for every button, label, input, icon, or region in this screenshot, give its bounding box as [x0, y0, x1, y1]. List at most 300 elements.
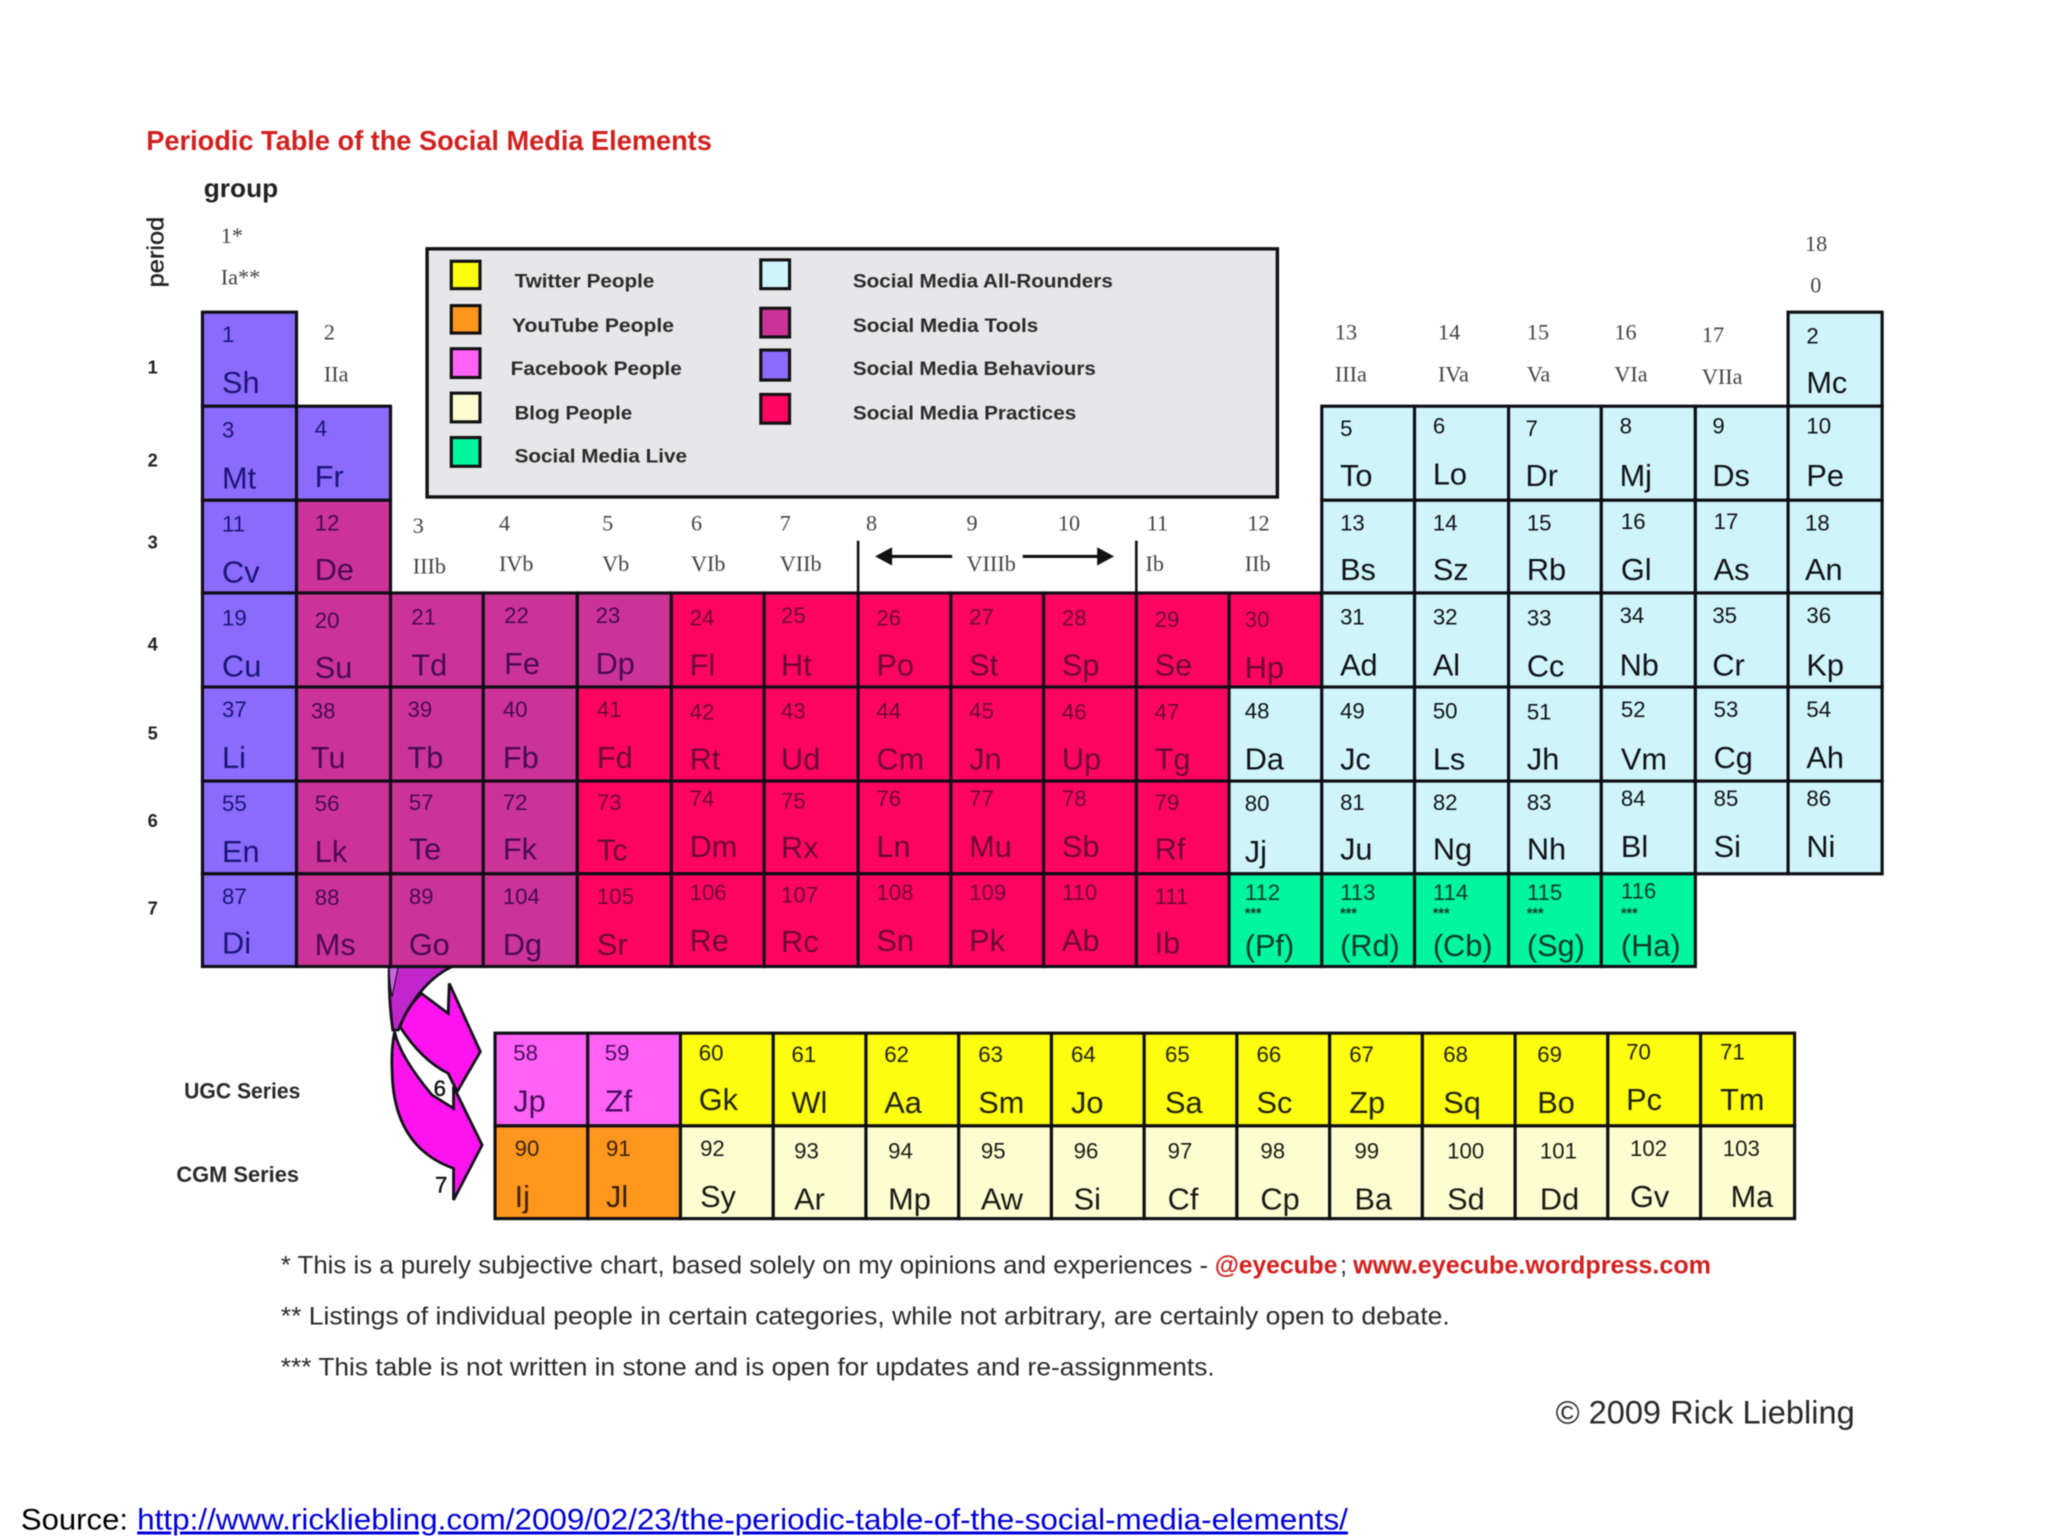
cell: Li — [202, 687, 296, 781]
cell: As: As — [1714, 552, 1749, 587]
cell: Cr: 35 — [1712, 603, 1737, 628]
group headers: 2 — [324, 320, 335, 345]
cell: Go — [391, 874, 483, 967]
group headers: 15 — [1527, 320, 1549, 345]
cell: Ma — [1701, 1126, 1795, 1219]
cell: Po: 26 — [876, 606, 901, 631]
cell: Kp: 36 — [1806, 603, 1831, 628]
cell: Sz: 14 — [1433, 510, 1458, 535]
cell: Pk — [951, 874, 1044, 967]
cell: Sp: 28 — [1062, 606, 1087, 631]
cell: Ms: Ms — [315, 927, 356, 962]
cell: Gl: Gl — [1621, 552, 1652, 587]
cell: Cv: Cv — [222, 555, 260, 590]
cell: Jo — [1051, 1033, 1144, 1126]
cell: Tm: Tm — [1720, 1082, 1764, 1117]
cell: Sd: 100 — [1447, 1139, 1484, 1164]
footnote 1: ; — [1340, 1252, 1347, 1279]
cell: Li: Li — [222, 740, 246, 775]
cell: Cc: Cc — [1527, 649, 1564, 684]
cell: Up: 46 — [1062, 700, 1087, 725]
cell: Sy: 92 — [700, 1136, 725, 1161]
group headers: VIIb — [780, 551, 822, 576]
cell: Se: 29 — [1155, 607, 1179, 632]
cell: Fr — [296, 406, 391, 500]
legend: Social Media Practices — [761, 394, 1076, 424]
cell: Al: Al — [1433, 647, 1460, 682]
cell: (Cb) — [1415, 874, 1509, 967]
cell: Ds: 9 — [1712, 414, 1725, 439]
cell: Pc: 70 — [1626, 1039, 1651, 1064]
cell: Hp: 30 — [1245, 607, 1269, 632]
cell: Sq: 68 — [1443, 1042, 1468, 1067]
cell: Sa: Sa — [1165, 1085, 1204, 1120]
cell: Up: Up — [1062, 741, 1101, 776]
cell: Jl — [588, 1126, 680, 1219]
cell: Ba: 99 — [1354, 1139, 1379, 1164]
cell: Ls: 50 — [1433, 698, 1458, 723]
cell: Al — [1415, 593, 1509, 687]
cell: Jn — [951, 687, 1044, 781]
cell: Ni: Ni — [1806, 829, 1835, 864]
cell: Ad: 31 — [1340, 604, 1365, 629]
cell: Nh — [1509, 781, 1601, 874]
footnote 3: *** This table is not written in stone and is open for updates and re-assignments. — [281, 1354, 1215, 1381]
cell: Mp — [866, 1126, 959, 1219]
group headers: 11 — [1147, 510, 1168, 535]
cell: St: St — [969, 647, 999, 682]
cell: Jj: 80 — [1245, 791, 1269, 816]
cell: Tg: 47 — [1155, 700, 1179, 725]
cell: De: 12 — [315, 510, 339, 535]
cell: Aa: Aa — [884, 1085, 923, 1120]
cell: Cf — [1144, 1126, 1237, 1219]
cell: Bl: Bl — [1621, 829, 1648, 864]
cell: Hp — [1229, 593, 1322, 687]
cell: Ms: 88 — [315, 885, 339, 910]
cell: (Sg): (Sg) — [1527, 928, 1585, 963]
cell: Lo — [1415, 406, 1509, 500]
cell: Cg — [1695, 687, 1788, 781]
cell: De — [296, 500, 391, 593]
cell: En: 55 — [222, 791, 247, 816]
cell: Ij: Ij — [515, 1179, 530, 1214]
cell: Fe: 22 — [504, 603, 529, 628]
cell: Tu — [296, 687, 391, 781]
cell: Ud — [764, 687, 858, 781]
cell: Cp — [1237, 1126, 1330, 1219]
legend: Twitter People — [451, 261, 654, 292]
cell: Cu: 19 — [222, 606, 247, 631]
cell: Mt — [202, 406, 296, 500]
cell: Tu: 38 — [311, 698, 336, 723]
cell: (Pf): *** — [1245, 906, 1262, 922]
cell: Sc: Sc — [1256, 1085, 1292, 1120]
cell: Se — [1136, 593, 1229, 687]
legend: Social Media Practices: Social Media Practices — [853, 402, 1076, 424]
cell: Jh: Jh — [1527, 741, 1559, 776]
cell: Mj: Mj — [1620, 458, 1652, 493]
cell: Cr — [1695, 593, 1788, 687]
cell: Fk — [483, 781, 577, 874]
cell: Tg: Tg — [1155, 741, 1190, 776]
cell: Ad: Ad — [1340, 647, 1378, 682]
cell: Ab: 110 — [1062, 880, 1097, 905]
cell: Tc: Tc — [597, 833, 628, 868]
cell: Hp: Hp — [1245, 650, 1284, 685]
cell: Su — [296, 593, 391, 687]
period numbers: 2 — [148, 449, 158, 470]
group headers: 12 — [1247, 510, 1270, 535]
legend: Social Media Live — [451, 438, 687, 467]
cell: Jp — [495, 1033, 588, 1126]
cell: Rf: 79 — [1155, 790, 1179, 815]
group headers: 14 — [1438, 320, 1460, 345]
cell: Re — [671, 874, 764, 967]
cell: Gl: 16 — [1621, 509, 1646, 534]
cell: Sb: Sb — [1062, 829, 1099, 864]
cell: (Rd): 113 — [1340, 880, 1375, 905]
cell: Rt: 42 — [690, 700, 714, 725]
cell: Fb — [483, 687, 577, 781]
cell: Cp: 98 — [1260, 1139, 1285, 1164]
group headers: 10 — [1058, 510, 1080, 535]
group headers: Vb — [602, 551, 629, 576]
cell: Sn: Sn — [876, 923, 914, 958]
cell: Cu: Cu — [222, 649, 261, 684]
cell: Dp: Dp — [596, 646, 635, 681]
title: Periodic Table of the Social Media Elements — [146, 125, 712, 156]
cell: Ma: 103 — [1723, 1136, 1760, 1161]
cell: Al: 32 — [1433, 604, 1458, 629]
cell: Jo: Jo — [1071, 1085, 1103, 1120]
cell: Ln — [858, 781, 951, 874]
cell: Dg — [483, 874, 577, 967]
cell: Bl — [1601, 781, 1695, 874]
cell: Sr: Sr — [597, 927, 628, 962]
cell: Gv: 102 — [1630, 1136, 1667, 1161]
cell: Mu: Mu — [969, 829, 1012, 864]
cell: Cm: Cm — [876, 741, 924, 776]
cell: Rc — [764, 874, 858, 967]
cell: Sr — [577, 874, 671, 967]
cell: Ib: Ib — [1155, 925, 1180, 960]
cell: Dr — [1509, 406, 1601, 500]
cell: Aw: 95 — [981, 1139, 1006, 1164]
cell: Jh: 51 — [1527, 700, 1552, 725]
cell: Fk: 72 — [503, 790, 528, 815]
group headers: VIIIb — [967, 551, 1016, 576]
cell: Tc — [577, 781, 671, 874]
legend: Twitter People: Twitter People — [515, 270, 654, 292]
cell: Sm: 63 — [978, 1042, 1003, 1067]
cell: Sa — [1144, 1033, 1237, 1126]
cell: (Ha): *** — [1621, 906, 1638, 922]
group headers: 6 — [691, 510, 702, 535]
cell: Rt: Rt — [690, 741, 721, 776]
legend: Social Media Behaviours: Social Media Behaviours — [853, 358, 1096, 380]
cell: Jl: Jl — [606, 1179, 628, 1214]
cell: Bo: Bo — [1537, 1085, 1575, 1120]
cell: Cm: 44 — [876, 698, 901, 723]
cell: Sc — [1237, 1033, 1330, 1126]
cell: Rf: Rf — [1155, 831, 1186, 866]
cell: Ng: Ng — [1433, 831, 1472, 866]
cell: Ht — [764, 593, 858, 687]
cell: Fr: Fr — [315, 459, 344, 494]
cell: Ba — [1330, 1126, 1422, 1219]
cell: (Rd) — [1322, 874, 1415, 967]
cell: Go: Go — [409, 927, 450, 962]
legend: Blog People — [451, 393, 632, 424]
cell: Mp: 94 — [888, 1139, 913, 1164]
group headers: 17 — [1702, 322, 1724, 347]
cell: As — [1695, 500, 1788, 593]
cell: Fb: 40 — [503, 697, 528, 722]
cell: Si — [1695, 781, 1788, 874]
group headers: 1* — [221, 223, 243, 248]
cell: Tg — [1136, 687, 1229, 781]
cell: Ln: Ln — [876, 829, 911, 864]
cell: Fl: Fl — [690, 647, 715, 682]
cell: Ma: Ma — [1731, 1179, 1774, 1214]
cell: Si: 96 — [1074, 1139, 1098, 1164]
cell: Bl: 84 — [1621, 786, 1646, 811]
cell: Da: Da — [1245, 741, 1285, 776]
cell: Rx: Rx — [781, 830, 819, 865]
cell: Fk: Fk — [503, 831, 538, 866]
cell: Di — [202, 874, 296, 967]
cell: Tb: 39 — [408, 697, 432, 722]
cell: (Cb): *** — [1433, 906, 1450, 922]
cell: Pe — [1788, 406, 1882, 500]
cell: Cg: Cg — [1714, 740, 1753, 775]
cell: Te — [391, 781, 483, 874]
cell: Sq: Sq — [1443, 1085, 1481, 1120]
cell: Cp: Cp — [1260, 1181, 1300, 1216]
cell: Aa: 62 — [884, 1042, 909, 1067]
cell: Td — [391, 593, 483, 687]
cell: An: 18 — [1805, 510, 1830, 535]
legend: Social Media Behaviours — [761, 350, 1096, 380]
series labels: CGM Series — [176, 1162, 299, 1187]
cell: St — [951, 593, 1044, 687]
cell: Zp: 67 — [1349, 1042, 1374, 1067]
cell: Kp — [1788, 593, 1882, 687]
cell: Sr: 105 — [597, 884, 634, 909]
cell: (Cb): (Cb) — [1433, 928, 1492, 963]
cell: Mp: Mp — [888, 1181, 931, 1216]
footnote 1: www.eyecube.wordpress.com — [1352, 1252, 1711, 1279]
cell: Vm: Vm — [1621, 741, 1667, 776]
cell: Te: Te — [409, 831, 441, 866]
cell: Zf — [588, 1033, 680, 1126]
cell: Dg: Dg — [503, 927, 542, 962]
legend: Blog People: Blog People — [515, 402, 632, 424]
legend: YouTube People — [451, 306, 674, 337]
series arrows: 7 — [435, 1172, 447, 1197]
cell: (Sg): 115 — [1527, 880, 1562, 905]
cell: Tb — [391, 687, 483, 781]
cell: Fb: Fb — [503, 740, 539, 775]
cell: To — [1322, 406, 1415, 500]
legend: Social Media All-Rounders — [761, 260, 1113, 292]
cell: (Sg) — [1509, 874, 1601, 967]
cell: Mc — [1788, 312, 1882, 406]
cell: An — [1788, 500, 1882, 593]
cell: Dp — [577, 593, 671, 687]
group headers: IIIa — [1335, 361, 1367, 386]
cell: Dg: 104 — [503, 884, 540, 909]
source line: http://www.rickliebling.com/2009/02/23/the-periodic-table-of-the-social-media-elements/ — [137, 1503, 1349, 1536]
cell: Cf: 97 — [1168, 1139, 1192, 1164]
cell: Po — [858, 593, 951, 687]
group headers: 5 — [602, 510, 613, 535]
cell: Sq — [1422, 1033, 1515, 1126]
cell: Su: 20 — [315, 608, 339, 633]
cell: Fe: Fe — [504, 646, 540, 681]
cell: Ni: 86 — [1806, 786, 1831, 811]
period numbers: 6 — [148, 810, 158, 831]
cell: Dm: Dm — [690, 829, 737, 864]
cell: Lk: Lk — [315, 834, 348, 869]
cell: Ah: 54 — [1806, 697, 1831, 722]
cell: Mc: 2 — [1806, 324, 1819, 349]
cell: Fd: 41 — [597, 697, 622, 722]
cell: Jj: Jj — [1245, 834, 1267, 869]
series arrows — [389, 967, 482, 1200]
cell: Sb: 78 — [1062, 786, 1087, 811]
cell: Kp: Kp — [1806, 647, 1844, 682]
cell: Vm — [1601, 687, 1695, 781]
cell: Nb: 34 — [1620, 603, 1644, 628]
cell: (Ha): (Ha) — [1621, 928, 1681, 963]
cell: Ad — [1322, 593, 1415, 687]
cell: Nh: Nh — [1527, 831, 1566, 866]
cell: Jl: 91 — [606, 1136, 631, 1161]
cell: Cc — [1509, 593, 1601, 687]
cell: St: 27 — [969, 604, 994, 629]
cell: Ud: 43 — [781, 698, 806, 723]
cell: En — [202, 781, 296, 874]
cell: Si: 85 — [1714, 786, 1738, 811]
group headers: 16 — [1614, 320, 1637, 345]
cell: Zf: 59 — [605, 1041, 629, 1066]
cell: Rx — [764, 781, 858, 874]
cell: Si: Si — [1074, 1181, 1101, 1216]
cell: Jp: Jp — [513, 1084, 546, 1119]
axis label: group: group — [204, 173, 278, 203]
cell: Sm: Sm — [978, 1085, 1024, 1120]
cell: Pc: Pc — [1626, 1082, 1662, 1117]
cell: Bs: 13 — [1340, 510, 1365, 535]
cell: Td: 21 — [411, 604, 436, 629]
cell: Ln: 76 — [876, 786, 901, 811]
cell: Lk: 56 — [315, 791, 339, 816]
cell: Mc: Mc — [1806, 365, 1847, 400]
cell: Cf: Cf — [1168, 1181, 1199, 1216]
cell: As: 17 — [1714, 509, 1738, 534]
cell: Mu — [951, 781, 1044, 874]
cell: Wl: 61 — [792, 1042, 816, 1067]
group headers: IIa — [324, 361, 349, 386]
group headers: 4 — [499, 510, 510, 535]
cell: Tu: Tu — [311, 740, 346, 775]
cell: Sc: 66 — [1256, 1042, 1281, 1067]
cell: Fd — [577, 687, 671, 781]
cell: (Rd): (Rd) — [1340, 928, 1400, 963]
cell: Tm — [1701, 1033, 1795, 1126]
group headers: Ia** — [221, 265, 260, 290]
cell: Jj — [1229, 781, 1322, 874]
cell: Fe — [483, 593, 577, 687]
cell: Gk: Gk — [699, 1082, 739, 1117]
cell: Lk — [296, 781, 391, 874]
legend: Social Media Tools: Social Media Tools — [853, 315, 1038, 337]
cell: Gv — [1608, 1126, 1701, 1219]
cell: Mu: 77 — [969, 786, 994, 811]
cell: Mj — [1601, 406, 1695, 500]
footnote 2: ** Listings of individual people in certain categories, while not arbitrary, are certainly open to debate. — [281, 1303, 1450, 1330]
cell: Lo: 6 — [1433, 414, 1445, 439]
legend: Facebook People — [451, 349, 682, 380]
cell: (Ha) — [1601, 874, 1695, 967]
cell: Gk — [680, 1033, 773, 1126]
cell: Dm: 74 — [690, 786, 714, 811]
cell: Pe: Pe — [1806, 458, 1844, 493]
cell: En: En — [222, 834, 260, 869]
cell: Dd — [1515, 1126, 1608, 1219]
panel: legend — [427, 249, 1277, 497]
cell: Pe: 10 — [1806, 414, 1831, 439]
cell: Ah: Ah — [1806, 740, 1844, 775]
cell: Di: Di — [222, 925, 251, 960]
group headers: 0 — [1810, 273, 1821, 298]
cell: Gv: Gv — [1630, 1179, 1670, 1214]
cell: (Rd): *** — [1340, 906, 1357, 922]
cell: Ls — [1415, 687, 1509, 781]
cell: Ni — [1788, 781, 1882, 874]
period numbers: 4 — [148, 633, 159, 654]
cell: Sz: Sz — [1433, 552, 1469, 587]
cell: Tm: 71 — [1720, 1039, 1745, 1064]
cell: Su: Su — [315, 650, 352, 685]
group headers: IVa — [1438, 361, 1469, 386]
cell: Di: 87 — [222, 884, 247, 909]
cell: Sd: Sd — [1447, 1181, 1485, 1216]
cell: Jo: 64 — [1071, 1042, 1096, 1067]
footnote 1: * This is a purely subjective chart, based solely on my opinions and experiences - — [281, 1252, 1208, 1279]
cell: Rb: Rb — [1527, 552, 1566, 587]
legend: Social Media Tools — [761, 308, 1038, 337]
cell: Si: Si — [1714, 829, 1741, 864]
cell: (Pf) — [1229, 874, 1322, 967]
cell: De: De — [315, 552, 354, 587]
cell: Wl — [773, 1033, 866, 1126]
cell: Gl — [1601, 500, 1695, 593]
cell: Dr: Dr — [1526, 458, 1558, 493]
cell: Ds: Ds — [1712, 458, 1750, 493]
cell: Zp: Zp — [1349, 1085, 1385, 1120]
cell: Go: 89 — [409, 884, 434, 909]
cell: Aw: Aw — [981, 1181, 1024, 1216]
cell: Aa — [866, 1033, 959, 1126]
cell: Cc: 33 — [1527, 606, 1552, 631]
group headers: 3 — [413, 513, 424, 538]
cell: Ij — [495, 1126, 588, 1219]
cell: Mt: 3 — [222, 418, 234, 443]
cell: (Ha): 116 — [1621, 879, 1656, 904]
